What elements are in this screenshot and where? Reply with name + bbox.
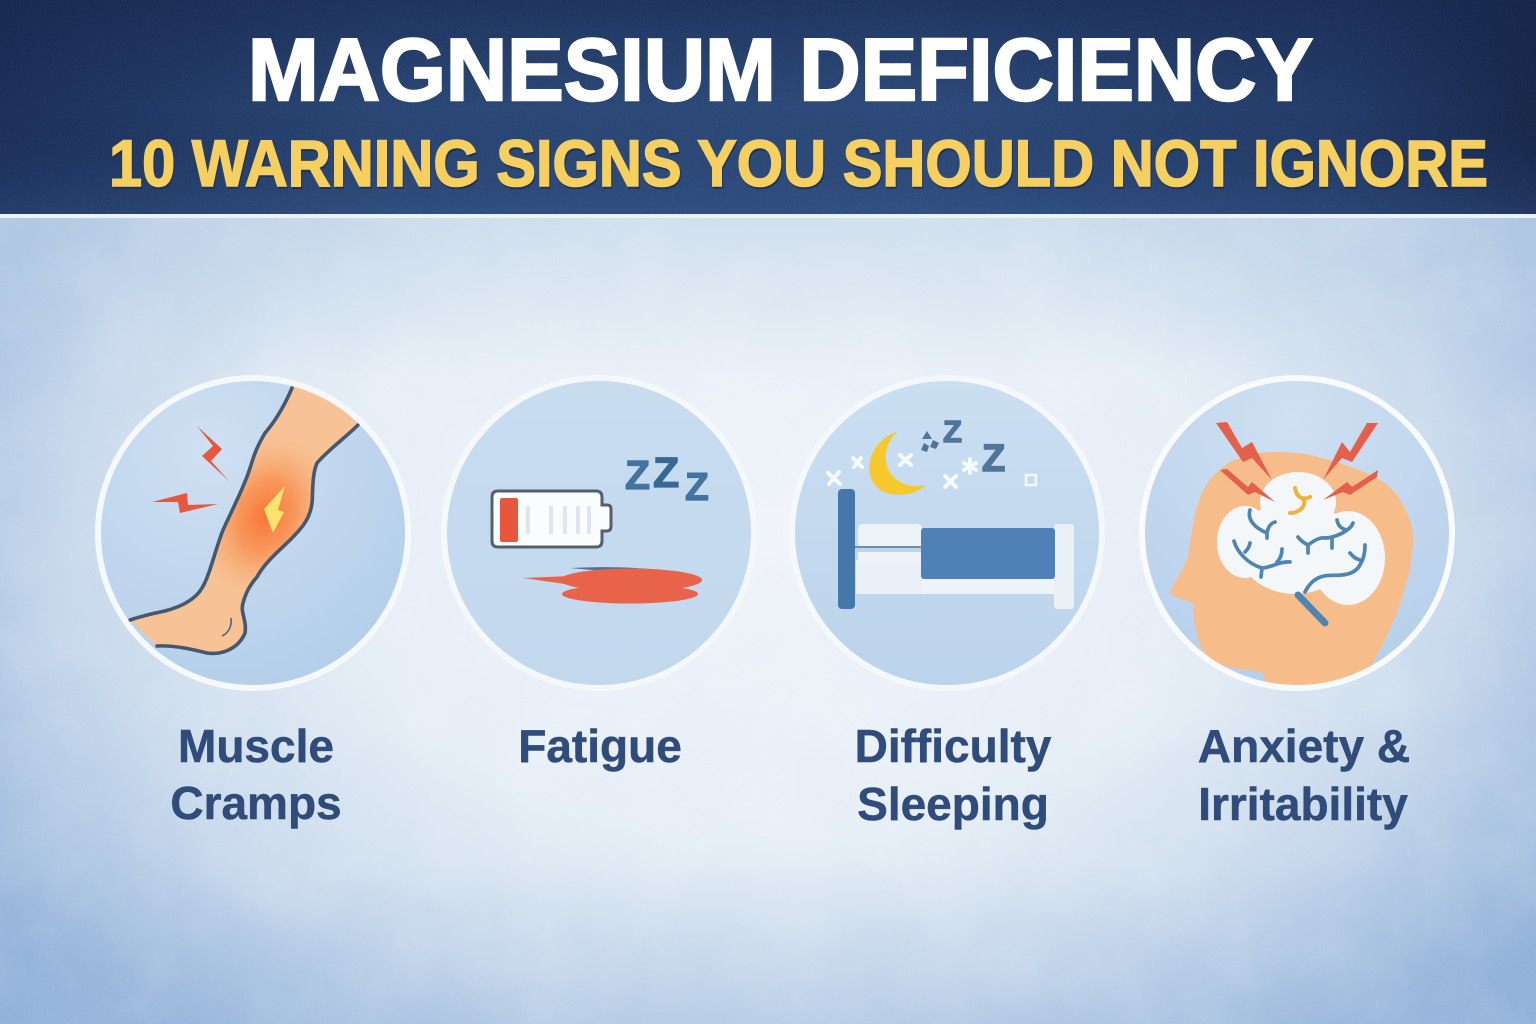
icon: Z letters <box>921 414 1005 480</box>
icon: Z letters: Z <box>943 414 962 449</box>
icon: crescent moon <box>869 432 927 495</box>
icon: leg <box>130 385 358 653</box>
icon: leg circle <box>98 378 408 688</box>
icon: bed <box>838 489 1074 609</box>
icon: Z letters: Z <box>625 452 650 498</box>
label: anxiety and irritability: Irritability <box>1198 778 1408 830</box>
title: MAGNESIUM DEFICIENCY <box>248 20 1313 119</box>
icon: Z letters: Z <box>685 466 709 509</box>
icon: low battery <box>492 491 611 547</box>
panel: anxiety and irritability <box>1142 378 1452 830</box>
panel: difficulty sleeping <box>792 378 1102 830</box>
icon: bed circle <box>792 378 1102 688</box>
icon: red bolts <box>152 426 229 513</box>
label: fatigue: Fatigue <box>518 720 682 772</box>
icon: Z letters <box>625 449 709 509</box>
icon: brain <box>1217 472 1385 623</box>
icon: small square <box>1026 475 1036 485</box>
header banner <box>0 0 1536 218</box>
icon: yellow bolt <box>264 486 285 533</box>
panel: muscle cramps <box>98 378 408 829</box>
icon: stars <box>828 455 976 487</box>
label: muscle cramps: Muscle <box>178 720 334 772</box>
icon: Z letters: Z <box>653 449 679 497</box>
label: muscle cramps: Cramps <box>170 777 342 829</box>
label: anxiety and irritability: Anxiety & <box>1198 720 1410 772</box>
icon: red energy streak <box>523 567 702 604</box>
icon: anger bolts <box>1216 422 1378 502</box>
icon: head circle <box>1142 378 1452 700</box>
panel: fatigue <box>444 378 754 772</box>
icon: battery circle <box>444 378 754 688</box>
icon: head silhouette <box>1170 452 1413 700</box>
label: difficulty sleeping: Difficulty <box>855 720 1052 772</box>
icon: Z letters: Z <box>982 438 1005 480</box>
label: difficulty sleeping: Sleeping <box>857 778 1049 830</box>
